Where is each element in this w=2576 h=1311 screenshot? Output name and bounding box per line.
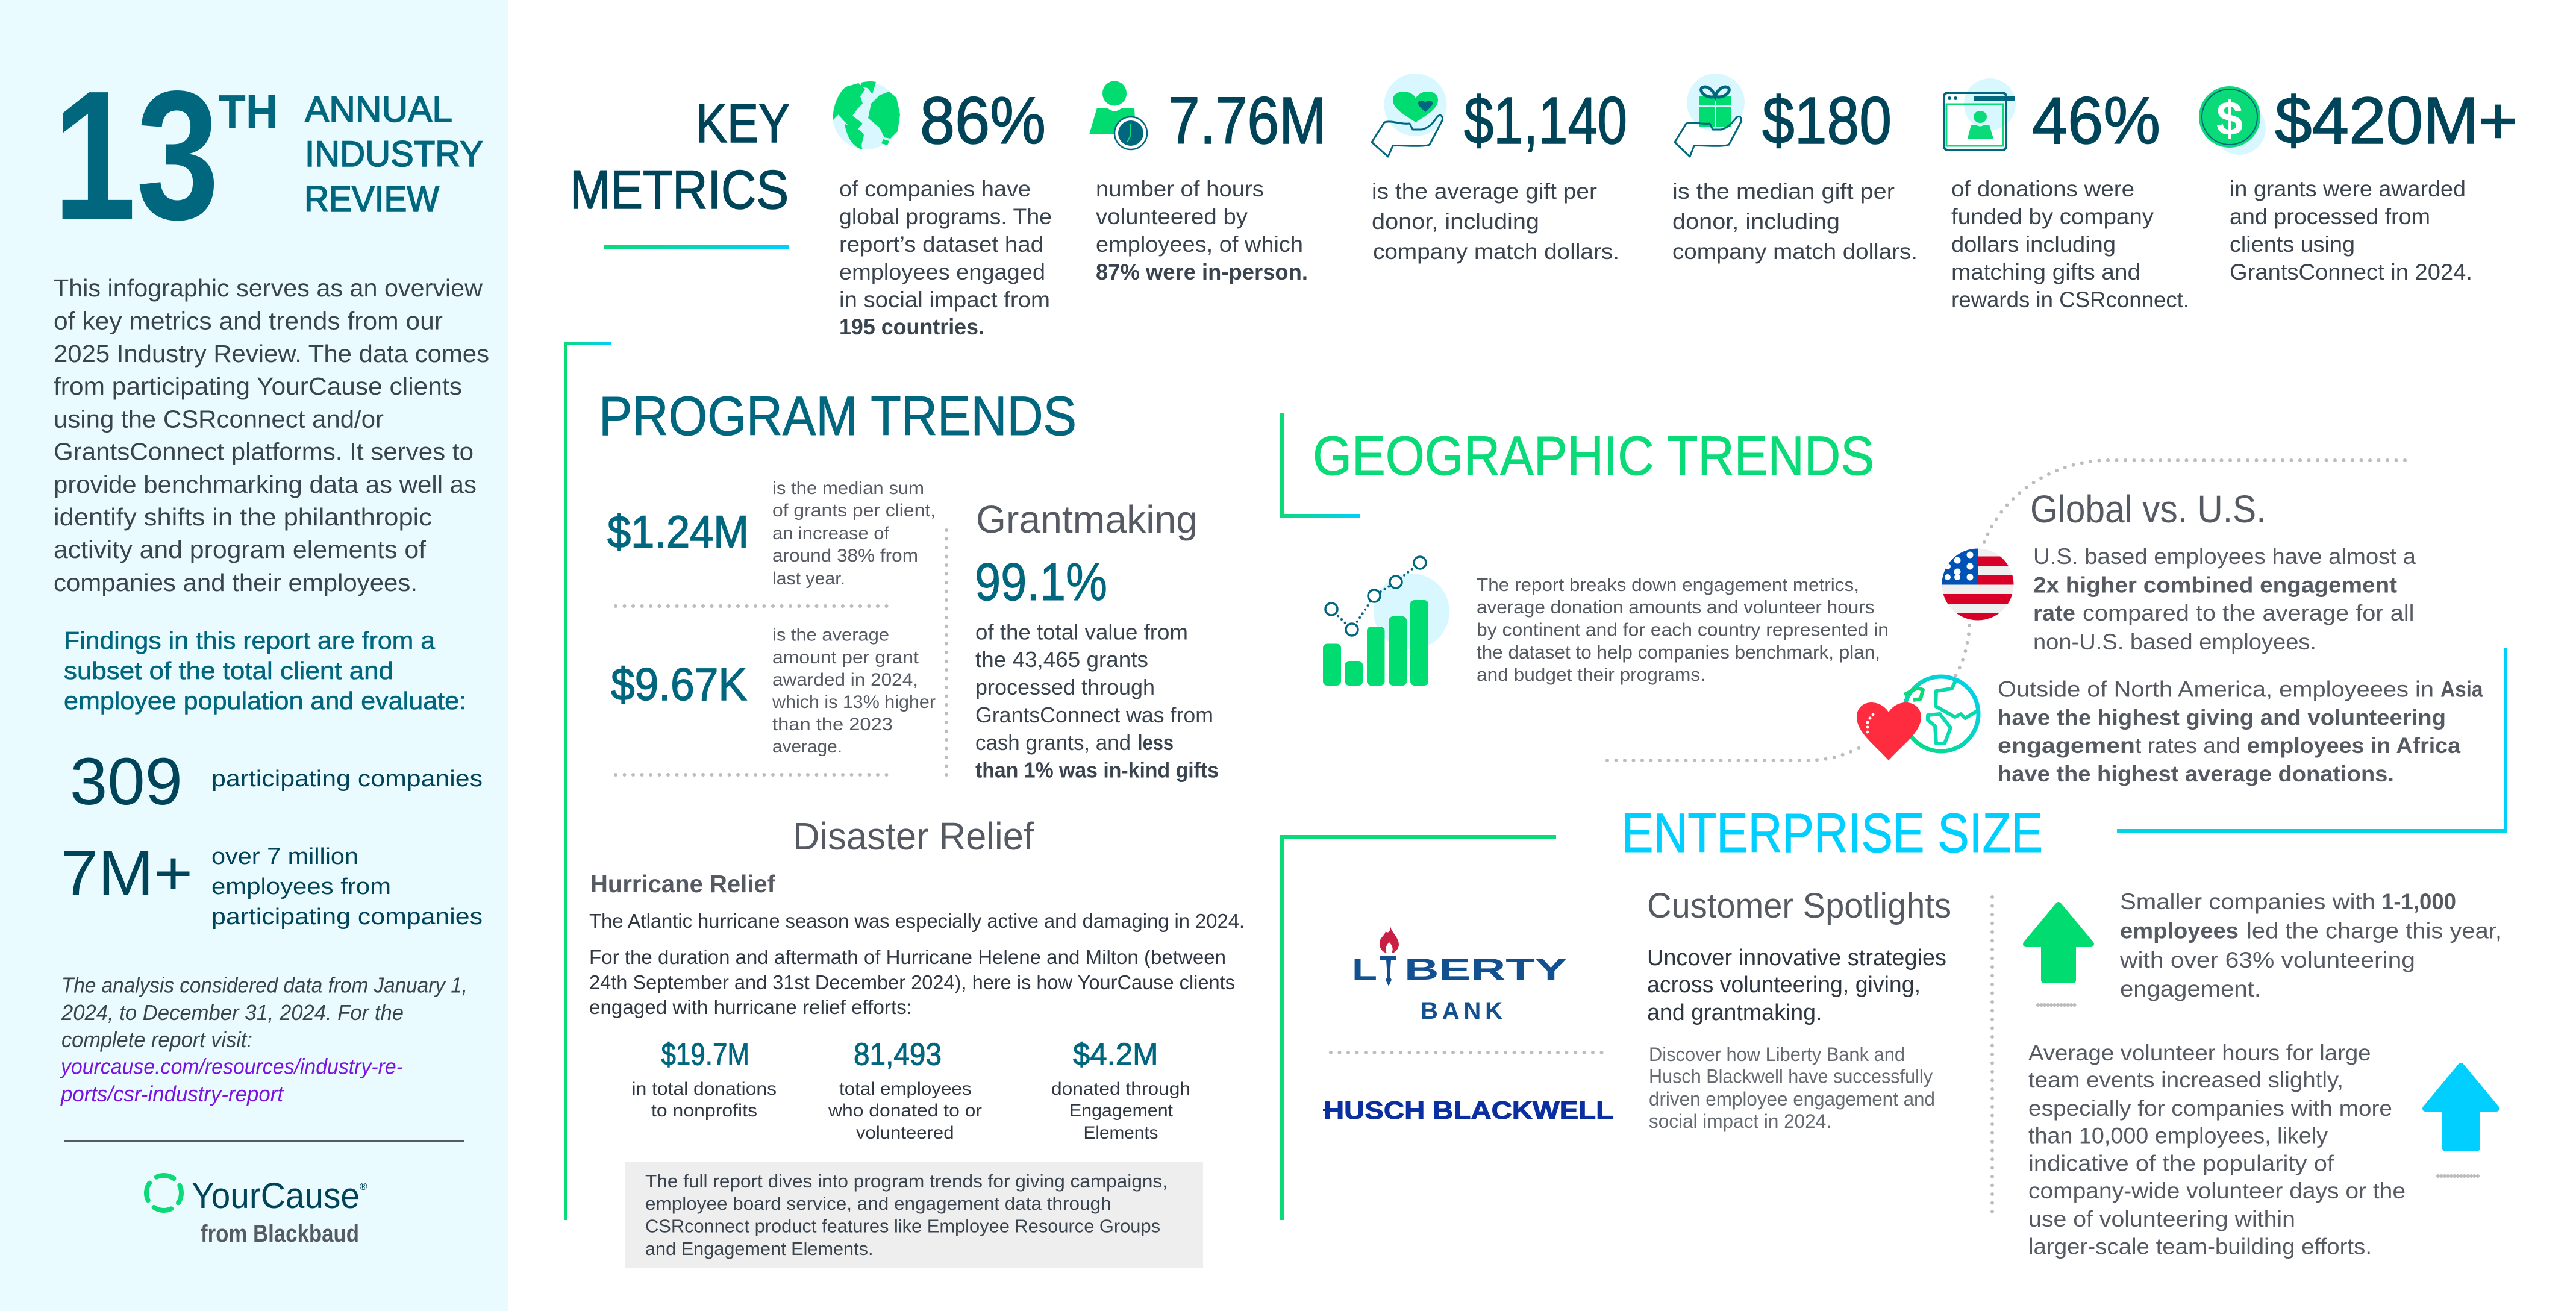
stat: 7M+ employees: 7M+ [61, 838, 193, 909]
metric: $180 median gift [1672, 74, 1918, 264]
stat: $1.24M median sum [607, 478, 936, 589]
block: global vs US [2030, 487, 2416, 654]
block: global vs US: non-U.S. based employees. [2033, 630, 2316, 654]
callout: full report [625, 1162, 1203, 1268]
stat: $9.67K average amount: which is 13% higher [772, 692, 936, 712]
text block: analysis note with report link: yourcause.com/resources/industry-re- [59, 1054, 403, 1078]
stat: 7M+ employees: over 7 million [211, 844, 358, 869]
stat: $9.67K average amount: $9.67K [611, 659, 747, 710]
panel: left sidebar [0, 0, 508, 1311]
block: outside of North America: t rates and [2135, 733, 2240, 758]
heading: enterprise size: ENTERPRISE SIZE [1622, 803, 2043, 864]
text block: average volunteer hours: company-wide volunteer days or the [2028, 1178, 2406, 1203]
stat: $19.7M donations: in total donations [631, 1079, 777, 1099]
logo: Husch Blackwell: HUSCH BLACKWELL [1324, 1096, 1613, 1124]
text block: analysis note with report link: The analysis considered data from January 1, [61, 972, 467, 998]
heading: program trends: PROGRAM TRENDS [599, 386, 1077, 447]
text block: analysis note with report link [59, 972, 467, 1106]
icon: hand holding gift [1675, 74, 1745, 157]
stat: 309 participating companies [70, 745, 483, 819]
stat: 7M+ employees: employees from [211, 874, 391, 900]
metric: $1,140 average gift [1372, 74, 1627, 264]
block: global vs US: U.S. based employees have almost a [2033, 544, 2416, 569]
text block: average volunteer hours: than 10,000 employees, likely [2028, 1123, 2328, 1148]
text block: report breakdown: by continent and for each country represented in [1477, 619, 1889, 640]
metric: 86% global programs: employees engaged [839, 260, 1045, 284]
stat: $9.67K average amount: amount per grant [772, 648, 919, 668]
text block: overview: identify shifts in the philanthropic [54, 503, 432, 531]
stat: $1.24M median sum: an increase of [772, 524, 890, 543]
metric: 7.76M volunteer hours [1089, 81, 1327, 284]
text block: smaller companies: engagement. [2120, 977, 2261, 1001]
stat: $4.2M engagement elements: donated through [1051, 1079, 1190, 1099]
panel: enterprise size [1280, 803, 2502, 1259]
text block: hurricane season [589, 910, 1245, 1018]
stat: $9.67K average amount: is the average [772, 625, 889, 645]
block: outside of North America: Outside of North America, employeees in [1998, 677, 2434, 701]
stat: $4.2M engagement elements: $4.2M [1073, 1037, 1158, 1072]
icon: green up arrow [2026, 905, 2091, 1005]
metric: 86% global programs: 195 countries. [839, 314, 984, 339]
text block: hurricane season: The Atlantic hurricane season was especially active and damaging in 2024. [589, 910, 1245, 932]
callout: full report: The full report dives into program trends for giving campaigns, [645, 1171, 1168, 1192]
block: grantmaking: less [1137, 730, 1174, 755]
stat: $19.7M donations: to nonprofits [651, 1101, 757, 1121]
text block: average volunteer hours: larger-scale team-building efforts. [2028, 1234, 2372, 1259]
block: global vs US: compared to the average for all [2083, 601, 2415, 625]
connector: dotted curve [1607, 460, 2405, 760]
text block: overview: provide benchmarking data as well as [54, 471, 477, 498]
icon: cyan up arrow [2425, 1066, 2496, 1176]
text block: smaller companies: 1-1,000 [2381, 889, 2456, 914]
stat: $9.67K average amount: than the 2023 [772, 715, 893, 734]
stat: $9.67K average amount [611, 625, 936, 757]
stat: $4.2M engagement elements: Engagement [1069, 1101, 1174, 1121]
text block: analysis note with report link: complete report visit: [61, 1027, 252, 1052]
heading: key metrics: METRICS [570, 160, 789, 221]
icon: bar chart with trend line [1323, 557, 1449, 686]
block: customer spotlights [1647, 886, 1951, 1132]
metric: 86% global programs: of companies have [839, 177, 1031, 201]
stat: $1.24M median sum: of grants per client, [772, 501, 936, 521]
stat: $9.67K average amount: average. [772, 737, 842, 757]
metric: $420M+ grants: clients using [2230, 232, 2355, 257]
metric: 46% company funded: rewards in CSRconnect. [1951, 287, 2189, 312]
stat: $1.24M median sum: is the median sum [772, 478, 924, 498]
metric: $420M+ grants: and processed from [2230, 204, 2430, 229]
stat: 81,493 employees: who donated to or [828, 1101, 982, 1121]
block: customer spotlights: Discover how Liberty Bank and [1649, 1043, 1905, 1065]
title: 13th annual industry review: INDUSTRY [305, 134, 483, 174]
metric: 86% global programs: in social impact from [839, 287, 1050, 312]
text block: report breakdown: The report breaks down engagement metrics, [1477, 574, 1859, 595]
text block: hurricane season: For the duration and aftermath of Hurricane Helene and Milton (between [589, 946, 1226, 968]
block: customer spotlights: Uncover innovative strategies [1647, 945, 1946, 971]
block: global vs US: rate [2033, 601, 2075, 625]
metric: 86% global programs: 86% [920, 84, 1046, 158]
block: customer spotlights: across volunteering, giving, [1647, 972, 1921, 998]
heading: key metrics: KEY [696, 93, 790, 154]
block: grantmaking: processed through [975, 675, 1155, 699]
text block: smaller companies: led the charge this year, [2246, 918, 2502, 943]
panel: program trends [564, 342, 1245, 1268]
text block: report breakdown: the dataset to help companies benchmark, plan, [1477, 642, 1880, 663]
logo: YourCause from Blackbaud: ® [360, 1181, 367, 1192]
text block: findings intro: employee population and evaluate: [64, 687, 466, 715]
text block: smaller companies: with over 63% volunteering [2119, 948, 2415, 972]
block: grantmaking: the 43,465 grants [975, 647, 1148, 672]
logo: Liberty Bank: BERTY [1404, 953, 1567, 986]
icon: person with stopwatch [1089, 81, 1147, 149]
text block: smaller companies [2119, 889, 2502, 1001]
stat: $19.7M donations: $19.7M [661, 1037, 749, 1072]
metric: $1,140 average gift: donor, including [1372, 209, 1539, 234]
metric: 46% company funded: 46% [2032, 84, 2160, 158]
block: grantmaking: than 1% was in-kind gifts [975, 758, 1219, 782]
block: customer spotlights: Husch Blackwell have successfully [1649, 1065, 1933, 1087]
logo: Liberty Bank: BANK [1421, 998, 1502, 1024]
block: outside of North America: have the highest giving and volunteering [1998, 705, 2446, 730]
logo: YourCause from Blackbaud: from Blackbaud [201, 1221, 359, 1247]
metric: 86% global programs: global programs. The [839, 204, 1052, 229]
panel: geographic trends [1280, 413, 2507, 833]
metric: 46% company funded: of donations were [1951, 177, 2134, 201]
metric: $180 median gift: is the median gift per [1672, 179, 1895, 204]
block: customer spotlights: driven employee engagement and [1649, 1088, 1935, 1110]
block: grantmaking [975, 498, 1219, 782]
metric: 46% company funded: dollars including [1951, 232, 2116, 257]
text block: average volunteer hours: team events increased slightly, [2028, 1068, 2343, 1092]
block: global vs US: Global vs. U.S. [2030, 487, 2266, 531]
text block: overview: This infographic serves as an overview [54, 274, 483, 302]
stat: $9.67K average amount: awarded in 2024, [772, 670, 918, 690]
text block: overview: from participating YourCause clients [54, 372, 462, 400]
text block: average volunteer hours: especially for companies with more [2028, 1096, 2392, 1121]
heading: disaster relief: Disaster Relief [793, 815, 1034, 858]
block: customer spotlights: social impact in 2024. [1649, 1110, 1831, 1132]
metric: 7.76M volunteer hours: 7.76M [1168, 84, 1327, 158]
stat: 7M+ employees: participating companies [211, 904, 483, 930]
subheading: hurricane relief: Hurricane Relief [590, 870, 775, 898]
icon: globe [833, 81, 900, 149]
block: outside of North America [1998, 677, 2483, 786]
text block: average volunteer hours: use of volunteering within [2028, 1207, 2295, 1231]
text block: hurricane season: 24th September and 31st December 2024), here is how YourCause clients [589, 971, 1235, 993]
title: 13th annual industry review [53, 52, 483, 258]
metric: $180 median gift: company match dollars. [1672, 239, 1918, 264]
text block: overview [54, 274, 489, 596]
text block: overview: 2025 Industry Review. The data comes [54, 340, 489, 368]
logo: Liberty Bank [1352, 927, 1567, 1024]
text block: report breakdown: and budget their programs. [1477, 664, 1705, 685]
metric: 7.76M volunteer hours: 87% were in-person. [1096, 260, 1308, 284]
stat: 309 participating companies: 309 [70, 745, 183, 819]
stat: $1.24M median sum: around 38% from [772, 546, 918, 566]
heading: geographic trends: GEOGRAPHIC TRENDS [1313, 425, 1874, 487]
text block: analysis note with report link: 2024, to December 31, 2024. For the [61, 1000, 404, 1025]
icon: browser window with person [1944, 78, 2016, 150]
block: outside of North America: have the highest average donations. [1998, 762, 2394, 786]
text block: findings intro [64, 627, 466, 715]
text block: overview: activity and program elements of [54, 536, 427, 563]
text block: findings intro: Findings in this report are from a [64, 627, 435, 654]
metric: $420M+ grants [2199, 84, 2518, 284]
metric: $420M+ grants: $420M+ [2275, 84, 2518, 158]
icon: globe with heart [1857, 677, 1978, 760]
metric: 86% global programs: report’s dataset had [839, 232, 1043, 257]
title: 13th annual industry review: REVIEW [304, 179, 439, 219]
stat: 81,493 employees [828, 1037, 982, 1143]
metric: $1,140 average gift: is the average gift per [1372, 179, 1597, 204]
stat: 81,493 employees: total employees [839, 1079, 971, 1099]
icon: dollar coin [2199, 86, 2266, 155]
text block: average volunteer hours: indicative of the popularity of [2028, 1151, 2334, 1176]
metric: $180 median gift: donor, including [1672, 209, 1840, 234]
block: grantmaking: of the total value from [975, 619, 1188, 645]
metric: $420M+ grants: in grants were awarded [2230, 177, 2466, 201]
logo: YourCause from Blackbaud [140, 1169, 367, 1247]
block: global vs US: 2x higher combined engagement [2033, 572, 2397, 598]
metric: 46% company funded: matching gifts and [1951, 260, 2140, 284]
stat: 81,493 employees: 81,493 [854, 1037, 942, 1072]
block: outside of North America: employees in Africa [2247, 733, 2460, 758]
stat: $1.24M median sum: last year. [772, 569, 845, 589]
text block: hurricane season: engaged with hurricane relief efforts: [589, 996, 912, 1018]
callout: full report: employee board service, and engagement data through [645, 1193, 1111, 1214]
text block: overview: companies and their employees. [54, 569, 417, 596]
block: grantmaking: cash grants, and [975, 730, 1131, 755]
text block: findings intro: subset of the total client and [64, 657, 393, 684]
metric: 7.76M volunteer hours: number of hours [1096, 177, 1264, 201]
text block: smaller companies: Smaller companies with [2120, 889, 2375, 914]
metric: 46% company funded [1944, 78, 2189, 312]
text block: analysis note with report link: ports/csr-industry-report [60, 1081, 284, 1106]
stat: 7M+ employees [61, 838, 483, 930]
metric: $1,140 average gift: company match dollars. [1373, 239, 1619, 264]
heading: key metrics [570, 93, 790, 249]
icon: US flag [1942, 548, 2014, 621]
text block: smaller companies: employees [2120, 918, 2239, 943]
block: customer spotlights: and grantmaking. [1647, 1000, 1822, 1025]
title: 13th annual industry review: ANNUAL [305, 89, 452, 130]
text block: report breakdown [1477, 574, 1889, 685]
metric: $1,140 average gift: $1,140 [1464, 84, 1627, 158]
logo: YourCause from Blackbaud: YourCause [192, 1175, 360, 1216]
icon: hand holding heart [1372, 74, 1447, 157]
stat: $1.24M median sum: $1.24M [607, 507, 749, 558]
icon: dollar coin: $ [2216, 92, 2243, 145]
metric: 7.76M volunteer hours: volunteered by [1096, 204, 1248, 229]
text block: overview: of key metrics and trends from our [54, 307, 443, 335]
metric: 7.76M volunteer hours: employees, of which [1096, 232, 1303, 257]
logo: Liberty Bank: L [1352, 953, 1377, 986]
stat: $4.2M engagement elements [1051, 1037, 1190, 1143]
block: grantmaking: 99.1% [975, 552, 1107, 612]
block: customer spotlights: Customer Spotlights [1647, 886, 1951, 925]
text block: overview: using the CSRconnect and/or [54, 405, 384, 433]
stat: $19.7M donations [631, 1037, 777, 1121]
block: grantmaking: Grantmaking [976, 498, 1198, 541]
stat: $4.2M engagement elements: Elements [1083, 1123, 1158, 1143]
block: grantmaking: GrantsConnect was from [975, 702, 1213, 727]
metric: $420M+ grants: GrantsConnect in 2024. [2230, 260, 2472, 284]
stat: 81,493 employees: volunteered [856, 1123, 954, 1143]
text block: overview: GrantsConnect platforms. It serves to [54, 437, 474, 465]
callout: full report: CSRconnect product features like Employee Resource Groups [645, 1216, 1160, 1236]
callout: full report: and Engagement Elements. [645, 1238, 874, 1259]
metric: $180 median gift: $180 [1762, 84, 1892, 158]
text block: average volunteer hours: Average volunteer hours for large [2028, 1040, 2371, 1065]
text block: average volunteer hours [2028, 1040, 2406, 1259]
metric: 86% global programs [833, 81, 1052, 339]
stat: 309 participating companies: participating companies [211, 766, 483, 792]
title: 13th annual industry review: TH [219, 85, 278, 139]
block: outside of North America: Asia [2440, 677, 2483, 701]
text block: report breakdown: average donation amounts and volunteer hours [1477, 596, 1875, 618]
metric: 46% company funded: funded by company [1951, 204, 2154, 229]
title: 13th annual industry review: 13 [53, 52, 219, 258]
block: outside of North America: engagemen [1998, 733, 2135, 758]
